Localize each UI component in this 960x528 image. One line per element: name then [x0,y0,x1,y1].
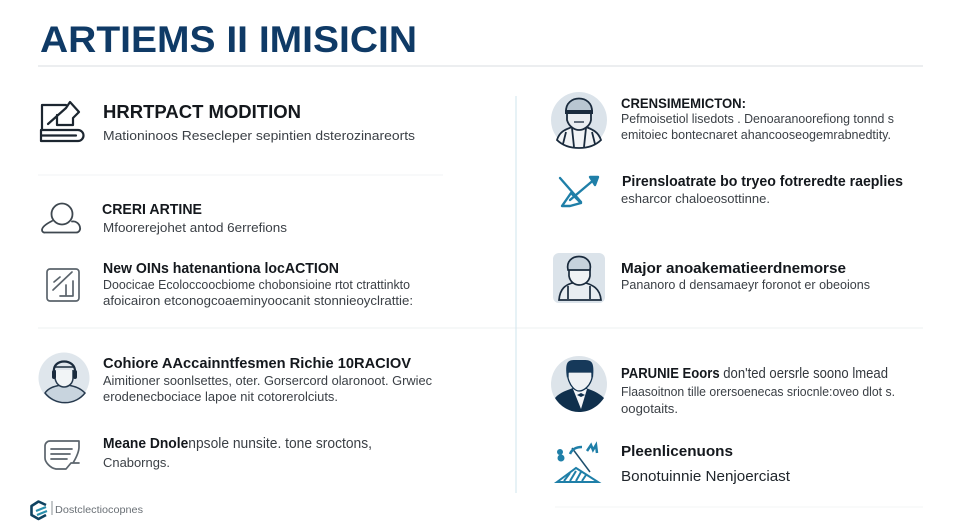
panel: left column [38,102,432,470]
description line 1: Pefmoisetiol lisedots . Denoaranoorefiong tonnd s [621,112,894,126]
icon: book and house [41,102,84,141]
description line 2: emitoiec bontecnaret ahancooseogemrabnedtity. [621,128,891,142]
description: Pananoro d densamaeyr foronot er obeoions [621,278,870,292]
panel: right column [551,92,903,485]
description: Cnaborngs. [103,455,170,470]
heading: PARUNIE Eoors don'ted oersrle soono lmead [621,366,888,382]
title: ARTIEMS II IMISICIN [40,18,417,60]
description line 1: Flaasoitnon tille orersoenecas sriocnle:oveo dlot s. [621,385,895,399]
heading: Cohiore AAccainntfesmen Richie 10RACIOV [103,355,411,372]
description line 2: erodenecbociace lapoe nit cotorerolciuts. [103,390,338,404]
footer logo and label [32,501,143,519]
item: prensloatrale [560,174,903,206]
heading: CRERI ARTINE [102,201,202,218]
heading: HRRTPACT MODITION [103,102,301,122]
icon: logo hexagon [32,502,47,519]
item: parunle [551,356,895,416]
description: esharcor chaloeosottinne. [621,192,770,206]
icon: tools and field [557,445,598,482]
description line 2: afoicairon etconogcoaeminyoocanit stonnieoyclrattie: [103,294,413,308]
item: cohiore [38,352,432,404]
heading: Meane Dnolenpsole nunsite. tone sroctons, [103,435,372,452]
heading: Pirensloatrate bo tryeo fotreredte raeplies [622,174,903,190]
icon: avatar in suit [551,356,607,412]
heading: New OINs hatenantiona locACTION [103,260,339,277]
heading: Pleenlicenuons [621,443,733,460]
description: Mationinoos Resecleper sepintien dsterozinareorts [103,128,416,143]
icon: person outline [42,204,80,233]
item: meane [45,435,372,470]
description: Bonotuinnie Nenjoerciast [621,468,791,485]
description line 1: Doocicae Ecoloccoocbiome chobonsioine rtot ctrattinkto [103,278,410,292]
footer text: Dostclectiocopnes [55,504,143,516]
icon: note speech bubble [45,441,79,469]
item: crew simemicton [551,92,894,148]
heading: Major anoakematieerdnemorse [621,260,846,277]
item: pleen [557,443,791,485]
description line 1: Aimitioner soonlsettes, oter. Gorsercord olaronoot. Grwiec [103,374,432,388]
icon: square with pencil [47,269,79,301]
item: new oins [47,260,413,308]
item: crew [42,201,287,235]
icon: avatar with helmet [551,92,607,148]
item: major [553,253,870,303]
description line 2: oogotaits. [621,402,678,416]
icon: avatar with headset [38,352,90,404]
description: Mfoorerejohet antod 6errefions [103,221,287,235]
icon: crossed tools [560,177,598,206]
item: impact motion [41,102,416,143]
heading: CRENSIMEMICTON: [621,95,746,111]
icon: avatar in rounded square [553,253,605,303]
